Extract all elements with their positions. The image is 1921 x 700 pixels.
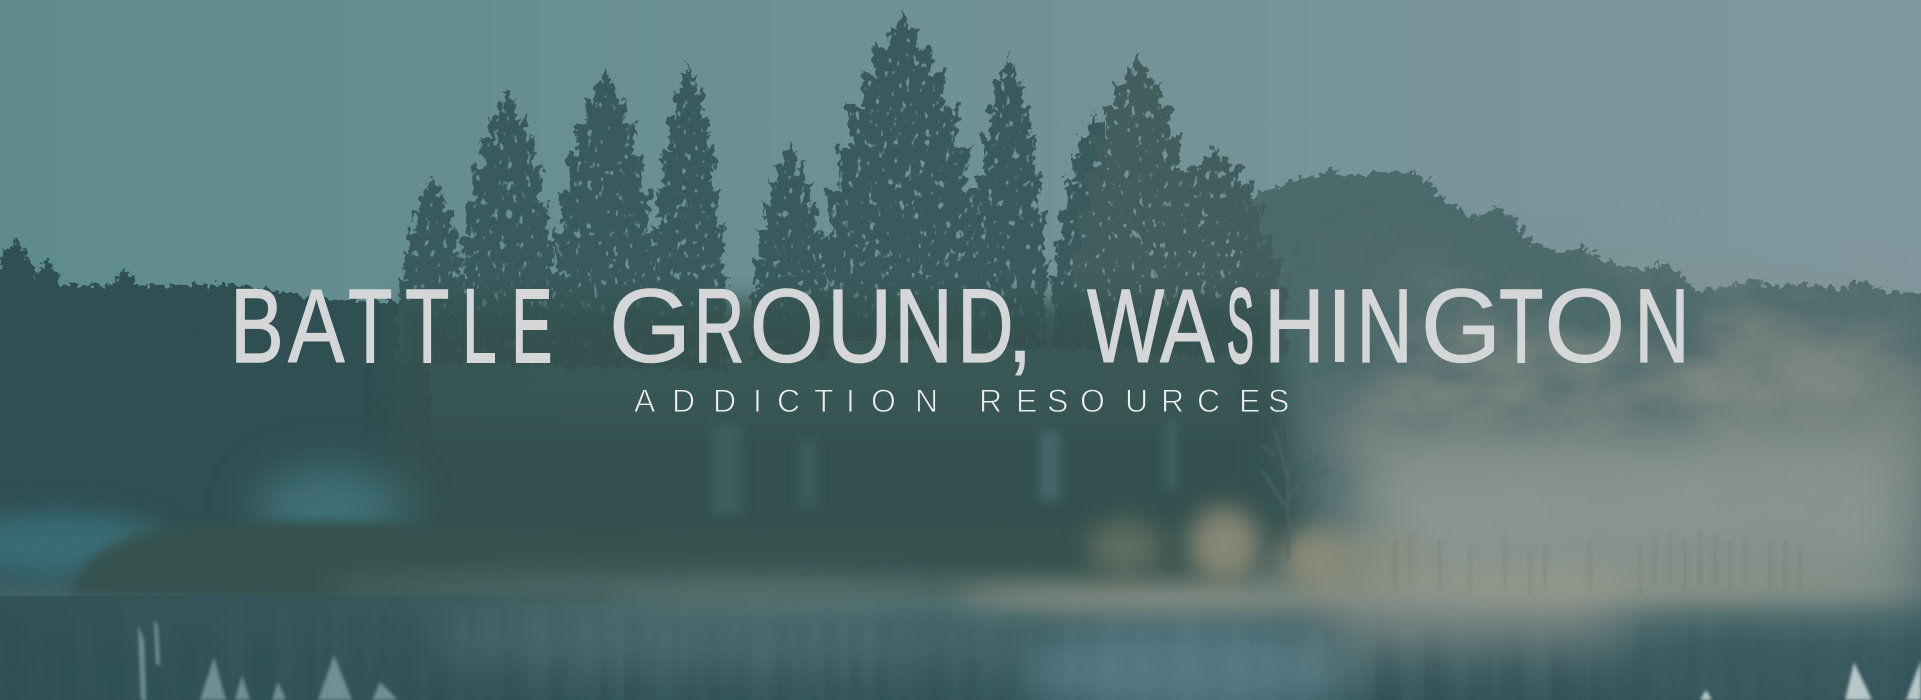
title: W [1087,267,1164,384]
teal haze over lower left forest [255,468,405,552]
left forest [0,238,430,630]
title: A [1160,267,1215,384]
reeds [1395,530,1800,595]
title: A [288,269,345,385]
light water reflection [420,614,1360,700]
bare tree [1262,430,1330,560]
fog over the island foot [320,570,1080,606]
island shoreline [70,520,1260,605]
title: O [1544,268,1626,385]
title: N [1634,268,1689,385]
title: D [957,267,1014,385]
title: , [1006,267,1034,385]
dark water area on the right [1610,630,1921,700]
title: G [1421,268,1502,385]
rolling mist texture [1350,290,1921,510]
tan bushes [1087,507,1340,586]
title: N [1356,267,1413,385]
dark lower tree mass [380,300,1310,560]
title: R [694,267,744,384]
title: H [1264,268,1325,385]
left teal water haze [0,513,170,577]
main tree stand [395,10,1140,369]
title: O [749,268,824,385]
solid lower forest backing [395,420,1255,580]
distant hill forest on the right [1240,165,1921,630]
water [0,565,1921,700]
subtitle: ADDICTIONRESOURCES [634,383,1289,419]
bright reflections bottom right [1700,660,1921,700]
title: I [1326,267,1353,385]
bright reflections bottom left [138,620,398,700]
tan mist band on water [600,530,1921,612]
water reflection streaks [0,600,1921,700]
sky gaps between trunks [712,420,1177,515]
title: T [348,269,392,385]
title: B [230,268,284,384]
title: U [827,267,893,384]
title: T [1499,269,1543,385]
title [230,267,1689,385]
title: N [894,267,953,384]
title: G [608,268,692,385]
olive tinted tree on the right of the stand [1070,52,1290,355]
title: S [1227,267,1254,384]
left water tone [0,596,640,700]
title: E [512,268,552,385]
title: L [462,268,496,385]
title: T [405,269,449,385]
right side mist [1320,340,1921,640]
